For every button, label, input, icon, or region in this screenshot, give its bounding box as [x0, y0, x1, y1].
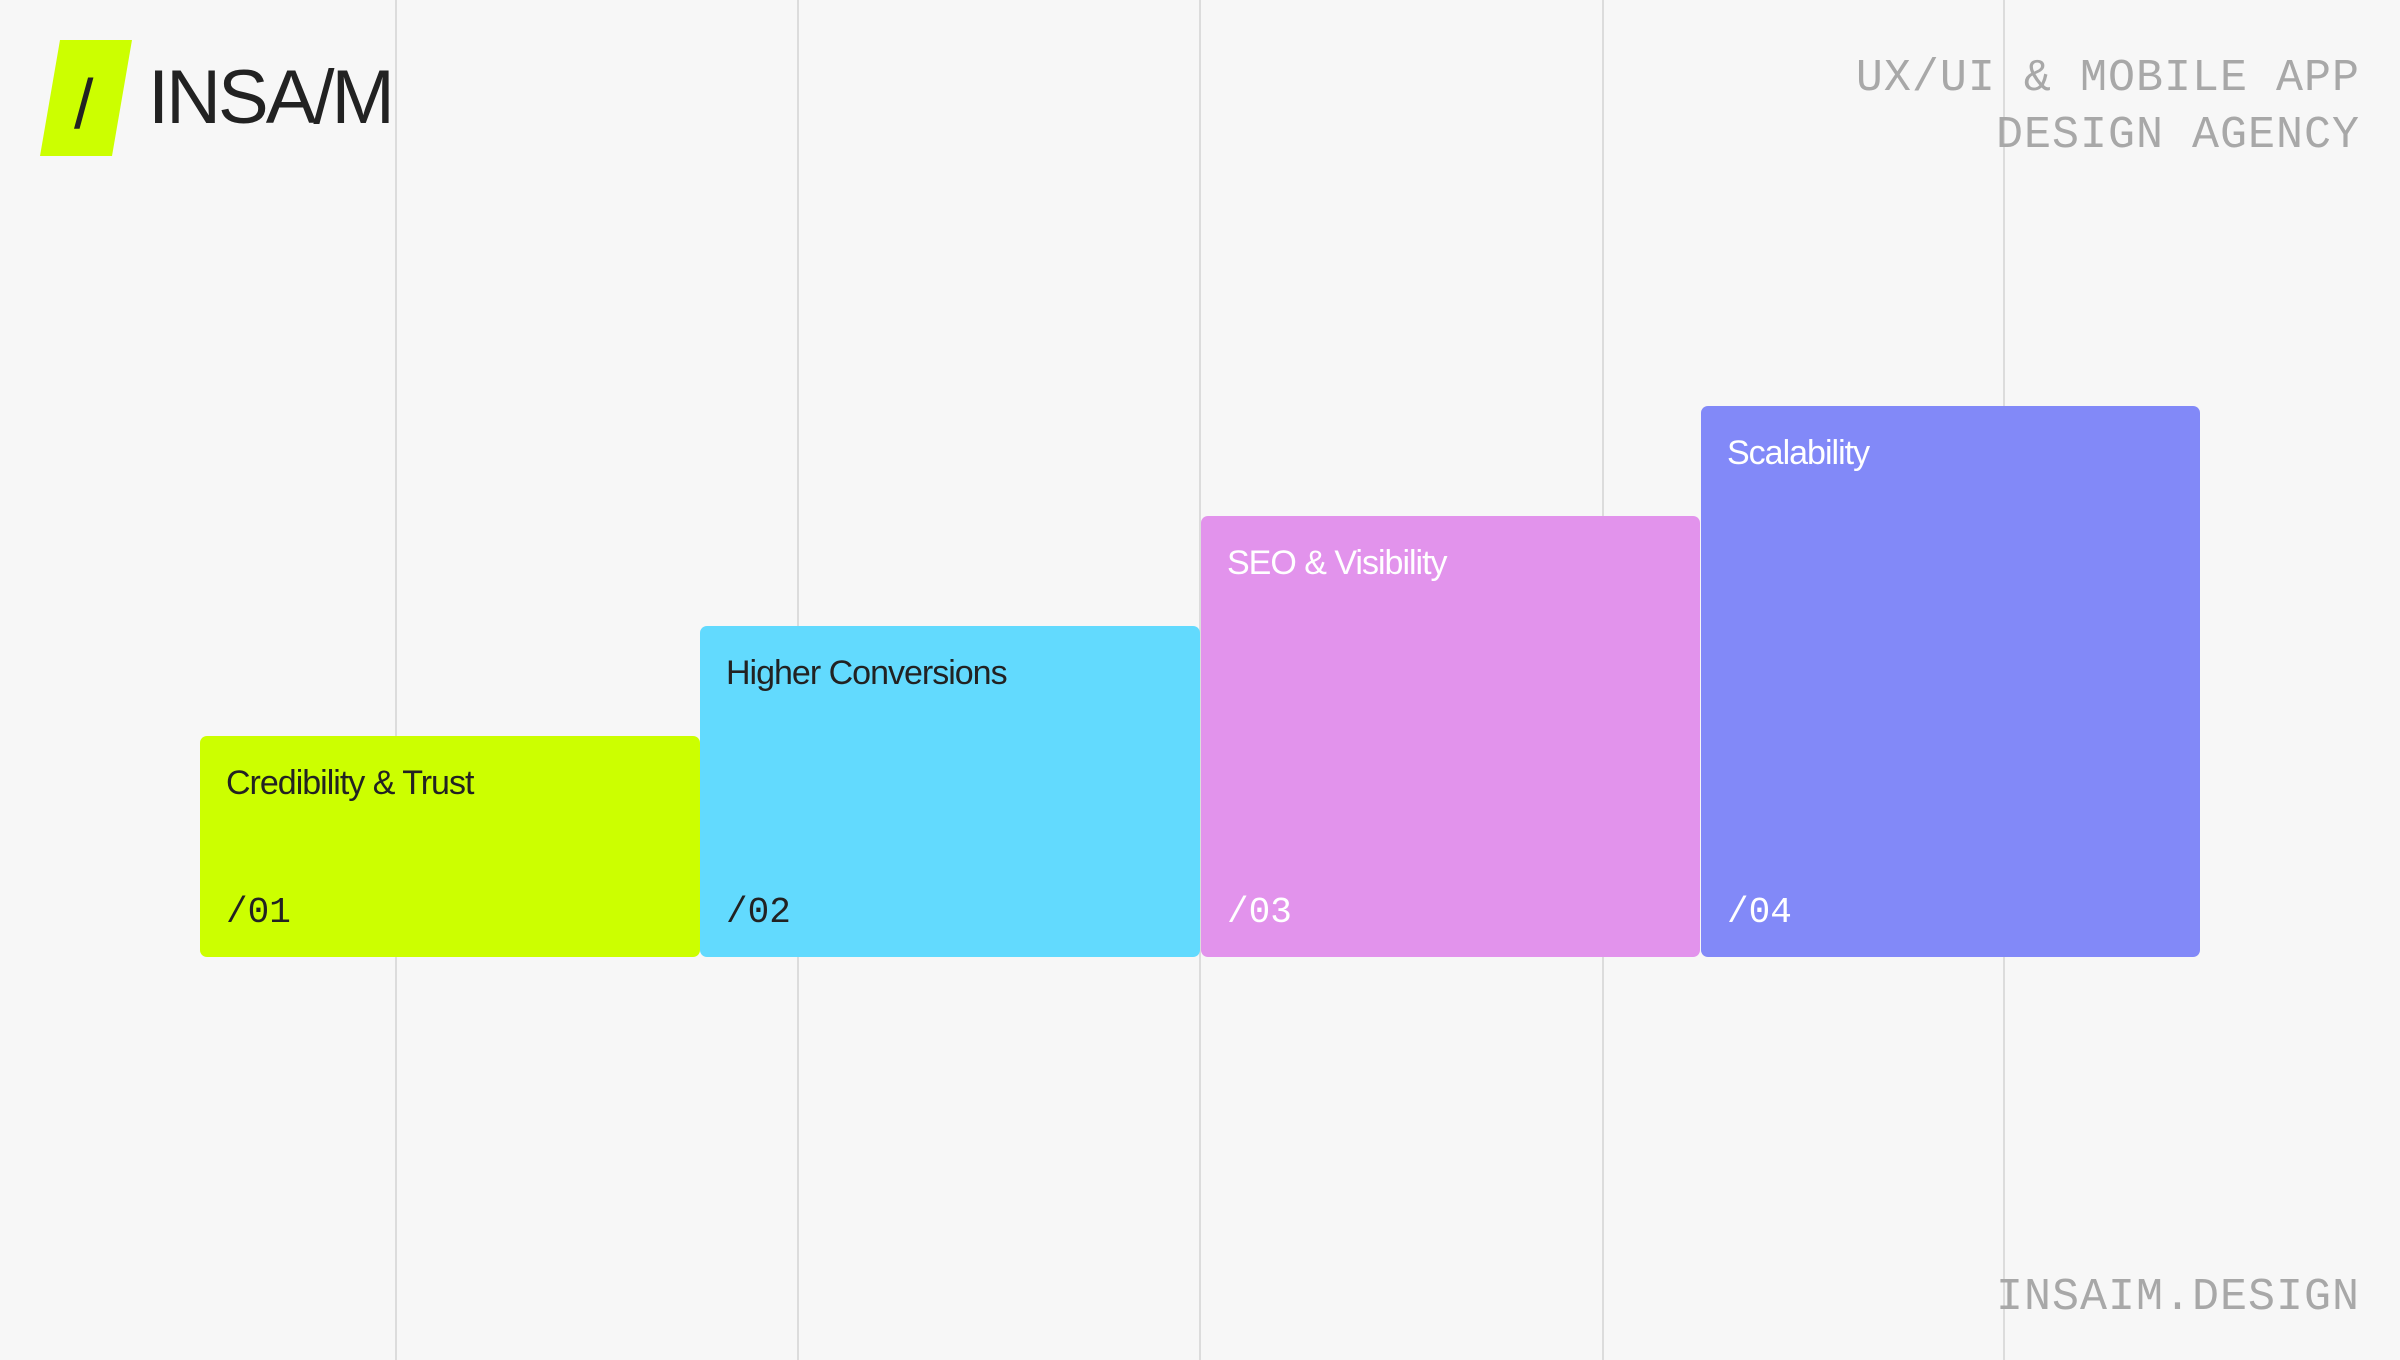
icon: logo parallelogram: / — [74, 65, 94, 143]
logo text: INSA/M — [148, 55, 392, 140]
panel: conversions: /02 — [726, 892, 791, 933]
panel: scalability: /04 — [1727, 892, 1792, 933]
panel: conversions: Higher Conversions — [726, 654, 1007, 692]
panel: credibility — [200, 736, 700, 957]
tagline: DESIGN AGENCY — [1996, 110, 2360, 161]
panel: scalability: Scalability — [1727, 434, 1869, 472]
panel: seo: SEO & Visibility — [1227, 544, 1447, 582]
panel: seo — [1201, 516, 1700, 957]
panel: credibility: /01 — [226, 892, 291, 933]
panel: seo: /03 — [1227, 892, 1292, 933]
logo — [40, 40, 392, 156]
panel: scalability — [1701, 406, 2200, 957]
footer url: INSAIM.DESIGN — [1996, 1272, 2360, 1323]
icon: logo parallelogram — [40, 40, 132, 156]
tagline: UX/UI & MOBILE APP — [1856, 53, 2360, 104]
tagline — [1856, 53, 2360, 161]
panel: credibility: Credibility & Trust — [226, 764, 473, 802]
panel: conversions — [700, 626, 1200, 957]
